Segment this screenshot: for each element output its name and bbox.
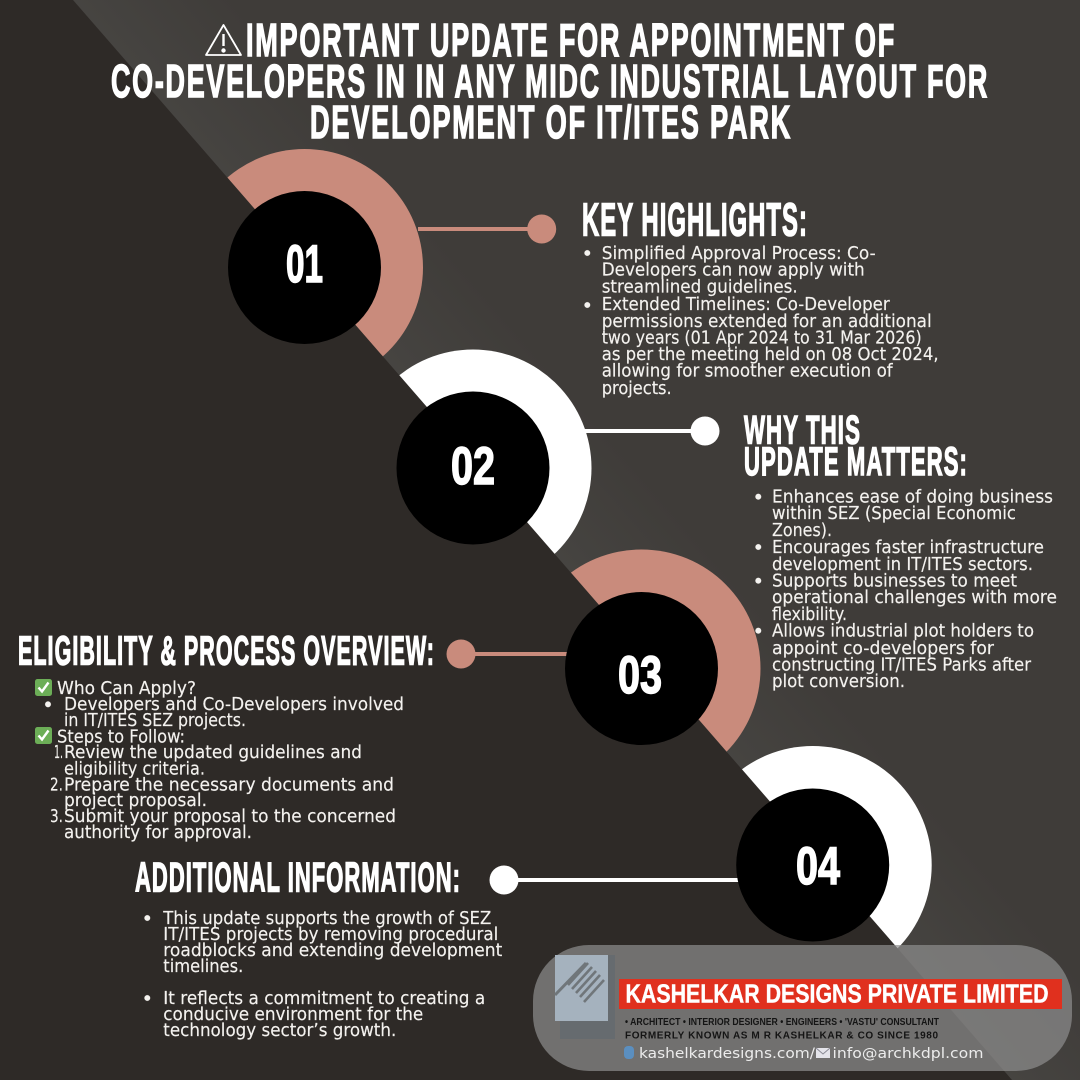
list: who can apply and steps xyxy=(45,679,404,843)
connector 04 xyxy=(490,866,740,894)
black circle 02 xyxy=(396,392,550,544)
arc 01 xyxy=(228,149,423,356)
arc 03 xyxy=(571,550,760,752)
step 04 graphic xyxy=(490,746,932,948)
bullet list: additional information: This update supports the growth of SEZ xyxy=(162,909,491,929)
footer background pill xyxy=(533,945,1072,1071)
number 01: 01 xyxy=(286,235,323,294)
bullet list: why this update matters: appoint co-developers for xyxy=(772,639,995,659)
step 01 graphic xyxy=(228,149,556,356)
list: who can apply and steps: Who Can Apply? xyxy=(57,679,196,699)
bullet list: key highlights: two years (01 Apr 2024 to 31 Mar 2026) xyxy=(602,328,922,348)
list: who can apply and steps: Steps to Follow: xyxy=(57,727,185,747)
bullet list: why this update matters: within SEZ (Special Economic xyxy=(772,504,1016,524)
heading: eligibility and process overview: ELIGIBILITY & PROCESS OVERVIEW: xyxy=(18,628,435,674)
bullet list: key highlights: projects. xyxy=(602,379,672,399)
list: who can apply and steps: Prepare the necessary documents and xyxy=(64,776,394,796)
bullet list: why this update matters: Supports businesses to meet xyxy=(772,572,1017,592)
heading: additional information: ADDITIONAL INFORMATION: xyxy=(135,854,461,900)
bullet list: why this update matters: Zones). xyxy=(772,521,832,541)
bullet list: why this update matters xyxy=(755,488,1057,692)
bullet list: key highlights xyxy=(584,244,939,399)
bullet list: additional information: IT/ITES projects by removing procedural xyxy=(163,925,498,945)
step 02 graphic xyxy=(396,350,720,554)
black circle 04 xyxy=(736,788,889,942)
bullet list: additional information: It reflects a commitment to creating a xyxy=(163,989,485,1009)
icon: globe xyxy=(624,1046,634,1059)
title xyxy=(111,14,989,148)
bullet list: additional information: conducive environment for the xyxy=(163,1005,423,1025)
panel: additional information xyxy=(135,854,502,1041)
email text: info@archkdpl.com xyxy=(832,1046,984,1062)
connector 01 xyxy=(418,214,556,244)
bullet list: key highlights: allowing for smoother execution of xyxy=(602,362,893,382)
icon: warning triangle xyxy=(206,25,241,55)
black circle 01 xyxy=(228,191,381,344)
panel: eligibility and process overview xyxy=(18,628,435,843)
bullet list: why this update matters: Encourages faster infrastructure xyxy=(772,538,1044,558)
heading: key highlights: KEY HIGHLIGHTS: xyxy=(582,194,808,246)
panel: why this update matters xyxy=(744,408,1057,692)
panel: key highlights xyxy=(582,194,939,399)
list: who can apply and steps: 2. xyxy=(50,776,63,796)
services line: • ARCHITECT • INTERIOR DESIGNER • ENGINEERS • 'VASTU' CONSULTANT xyxy=(625,1016,939,1028)
bullet list: key highlights: as per the meeting held on 08 Oct 2024, xyxy=(602,345,939,365)
bullet list: key highlights: Extended Timelines: Co-Developer xyxy=(602,295,890,315)
arc 04 xyxy=(742,746,932,948)
bullet list: key highlights: Simplified Approval Process: Co- xyxy=(602,244,876,264)
website text: kashelkardesigns.com/ xyxy=(639,1046,815,1062)
icon: envelope xyxy=(816,1048,830,1058)
icon: green check 1 xyxy=(35,679,52,696)
list: who can apply and steps: Developers and Co-Developers involved xyxy=(64,695,404,715)
bullet list: why this update matters: constructing IT/ITES Parks after xyxy=(772,656,1032,676)
heading: why this update matters: WHY THIS xyxy=(744,408,861,452)
list: who can apply and steps: authority for approval. xyxy=(64,823,252,843)
list: who can apply and steps: 1. xyxy=(54,743,63,763)
number 04: 04 xyxy=(796,837,840,896)
bullet list: key highlights: Developers can now apply with xyxy=(602,261,865,281)
bullet list: why this update matters: operational challenges with more xyxy=(772,588,1057,608)
connector 02 xyxy=(582,416,720,446)
bullet list: why this update matters: Enhances ease of doing business xyxy=(772,488,1053,508)
connector 03 xyxy=(446,640,570,668)
bullet list: key highlights: streamlined guidelines. xyxy=(602,278,798,298)
list: who can apply and steps: in IT/ITES SEZ projects. xyxy=(64,711,246,731)
bullet list: why this update matters: development in IT/ITES sectors. xyxy=(772,555,1033,575)
bullet list: why this update matters: flexibility. xyxy=(772,605,847,625)
list: who can apply and steps: Review the updated guidelines and xyxy=(64,743,362,763)
number 03: 03 xyxy=(618,646,662,705)
list: who can apply and steps: 3. xyxy=(50,807,63,827)
bullet list: why this update matters: Allows industrial plot holders to xyxy=(772,622,1034,642)
heading: why this update matters xyxy=(744,408,968,484)
list: who can apply and steps: Submit your proposal to the concerned xyxy=(64,807,396,827)
formerly known line: FORMERLY KNOWN AS M R KASHELKAR & CO SINCE 1980 xyxy=(625,1030,938,1041)
icon: green check 2 xyxy=(35,727,52,744)
bullet list: additional information: timelines. xyxy=(163,957,243,977)
bullet list: additional information xyxy=(144,909,502,1041)
list: who can apply and steps: project proposal. xyxy=(64,791,207,811)
number 02: 02 xyxy=(451,437,495,496)
icon: company logo mark xyxy=(555,955,615,1039)
black circle 03 xyxy=(565,592,718,745)
bullet list: additional information: technology sector’s growth. xyxy=(163,1021,396,1041)
bullet list: additional information: roadblocks and extending development xyxy=(163,941,502,961)
bullet list: why this update matters: plot conversion. xyxy=(772,672,905,692)
arc 02 xyxy=(399,350,592,554)
list: who can apply and steps: eligibility criteria. xyxy=(64,759,205,779)
panel: company logo footer xyxy=(533,945,1072,1071)
step 03 graphic xyxy=(446,550,760,752)
bullet list: key highlights: permissions extended for an additional xyxy=(602,312,932,332)
